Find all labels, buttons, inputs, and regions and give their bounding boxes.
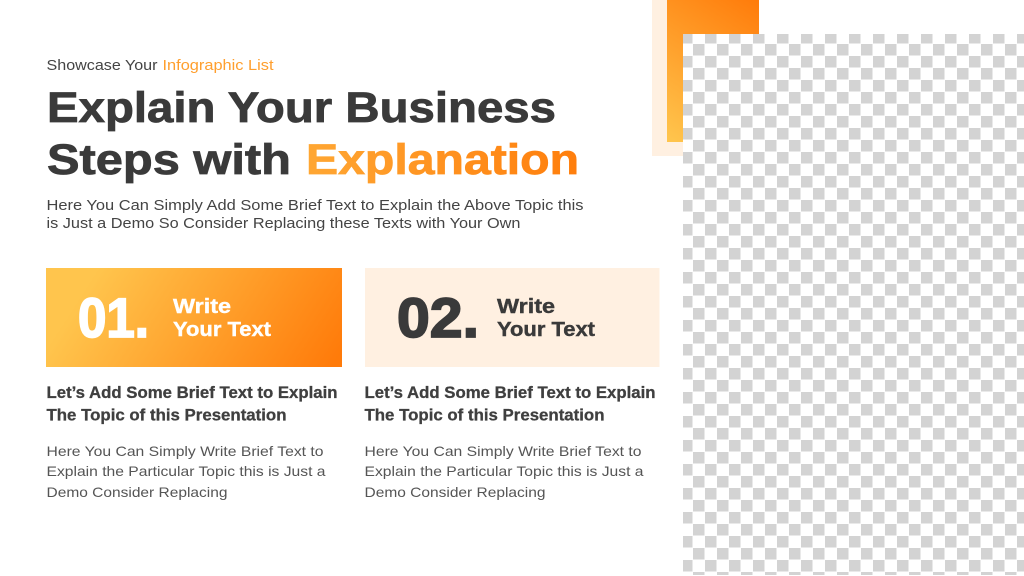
image placeholder: checkerboard [683,34,1024,575]
column 1 subheading: The Topic of this Presentation [46,406,286,424]
column 2 subheading: Let’s Add Some Brief Text to Explain [364,384,656,402]
step number 01: 01. [78,286,149,349]
title [47,84,579,184]
column 2 subheading [364,384,656,424]
column 1 subheading: Let’s Add Some Brief Text to Explain [46,384,338,402]
column 2 subheading: The Topic of this Presentation [364,406,604,424]
eyebrow heading [46,58,274,74]
column 2 body text: Explain the Particular Topic this is Just a [364,463,644,479]
intro text block [46,197,584,232]
step label 01: Your Text [173,319,271,341]
step label 01 [173,296,271,341]
step label 02: Write [497,296,555,318]
column 1 body text [46,443,326,500]
title: Explain Your Business [47,84,556,132]
panel: step 01 [46,268,342,367]
step label 02 [497,296,595,341]
column 1 subheading [46,384,338,424]
step label 01: Write [173,296,231,318]
column 2 body text [364,443,644,500]
eyebrow heading: Showcase Your [46,58,158,74]
title: Explanation [306,136,579,184]
decorative panel: orange gradient block [667,0,759,142]
panel: step 02 [365,268,660,367]
column 1 body text: Explain the Particular Topic this is Just a [46,463,326,479]
column 2 body text: Here You Can Simply Write Brief Text to [364,443,642,459]
column 2 body text: Demo Consider Replacing [364,484,546,500]
intro text block: Here You Can Simply Add Some Brief Text to Explain the Above Topic this [46,197,584,214]
column 1 body text: Demo Consider Replacing [46,484,228,500]
intro text block: is Just a Demo So Consider Replacing these Texts with Your Own [46,215,520,232]
decorative panel: pale backing square [652,0,692,156]
column 1 body text: Here You Can Simply Write Brief Text to [46,443,324,459]
step label 02: Your Text [497,319,595,341]
title: Steps with [47,136,291,184]
step number 02: 02. [397,286,479,349]
eyebrow heading: Infographic List [162,58,274,74]
